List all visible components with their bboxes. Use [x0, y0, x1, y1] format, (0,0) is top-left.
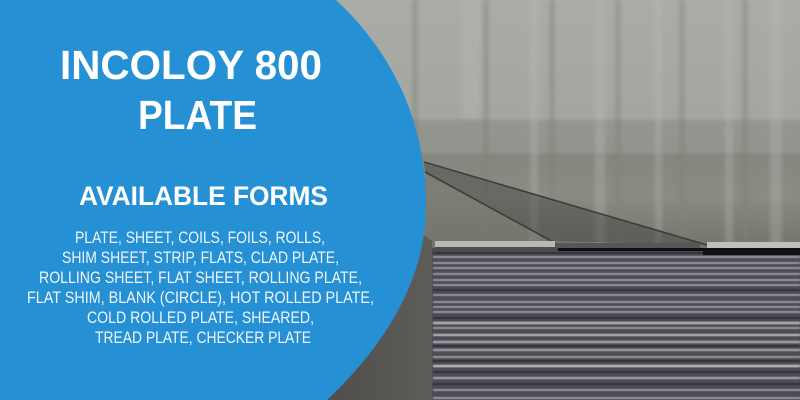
list of forms: SHIM SHEET, STRIP, FLATS, CLAD PLATE, [62, 249, 339, 267]
subheading: available forms: AVAILABLE FORMS [79, 181, 328, 211]
title: INCOLOY 800 [60, 42, 322, 88]
background photo: metal wall [300, 0, 800, 260]
list of forms: ROLLING SHEET, FLAT SHEET, ROLLING PLATE, [39, 269, 362, 287]
title: PLATE [138, 92, 257, 138]
dark reflective plate surface [424, 162, 707, 245]
list of forms: FLAT SHIM, BLANK (CIRCLE), HOT ROLLED PLATE, [27, 289, 374, 307]
title [60, 42, 322, 138]
list of forms: COLD ROLLED PLATE, SHEARED, [87, 309, 314, 327]
list of forms: TREAD PLATE, CHECKER PLATE [95, 329, 311, 347]
blue circle panel [0, 0, 426, 400]
top plate edges [435, 241, 800, 255]
plate stack front [432, 248, 800, 400]
list of forms [27, 229, 374, 347]
side of plate stack [300, 232, 434, 400]
list of forms: PLATE, SHEET, COILS, FOILS, ROLLS, [75, 229, 325, 247]
